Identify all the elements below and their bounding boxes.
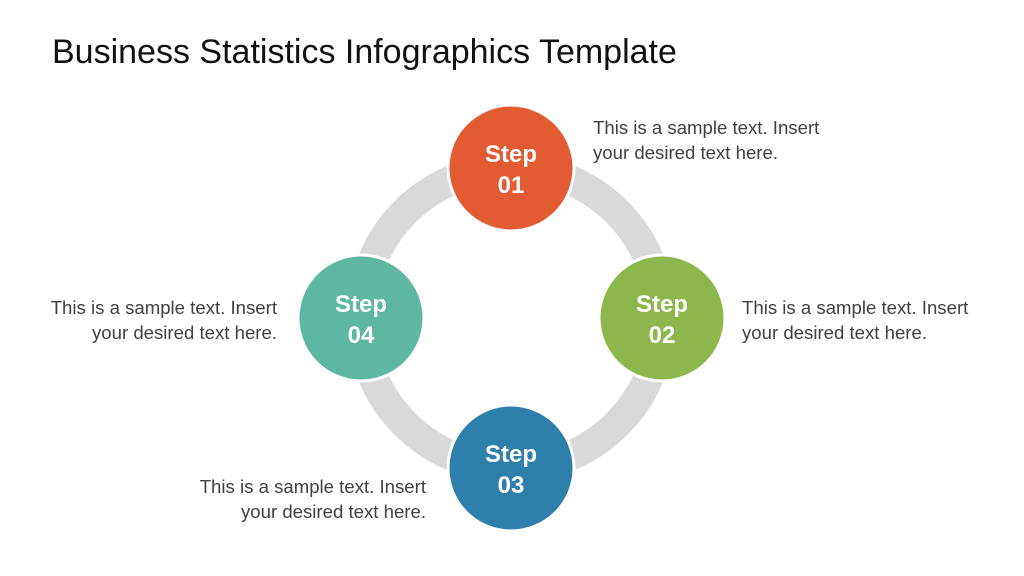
step 03: 03	[498, 472, 524, 499]
text step 02	[742, 297, 968, 343]
step 04: 04	[348, 322, 375, 349]
text step 03: your desired text here.	[241, 501, 426, 522]
step 01: Step	[485, 141, 537, 168]
step 01: 01	[498, 172, 524, 199]
step 04	[298, 255, 424, 381]
text step 04: This is a sample text. Insert	[51, 297, 277, 318]
text step 02: your desired text here.	[742, 322, 927, 343]
text step 04: your desired text here.	[92, 322, 277, 343]
text step 01: This is a sample text. Insert	[593, 117, 819, 138]
step 03	[448, 405, 574, 531]
title: Business Statistics Infographics Template	[52, 33, 677, 71]
text step 01: your desired text here.	[593, 142, 778, 163]
text step 03: This is a sample text. Insert	[200, 476, 426, 497]
step 03: Step	[485, 441, 537, 468]
step 02	[599, 255, 725, 381]
text step 02: This is a sample text. Insert	[742, 297, 968, 318]
ring	[361, 168, 661, 468]
text step 03	[200, 476, 426, 522]
text step 04	[51, 297, 277, 343]
step 04: Step	[335, 291, 387, 318]
text step 01	[593, 117, 820, 163]
step 02: 02	[649, 322, 675, 349]
step 02: Step	[636, 291, 688, 318]
step 01	[448, 105, 574, 231]
